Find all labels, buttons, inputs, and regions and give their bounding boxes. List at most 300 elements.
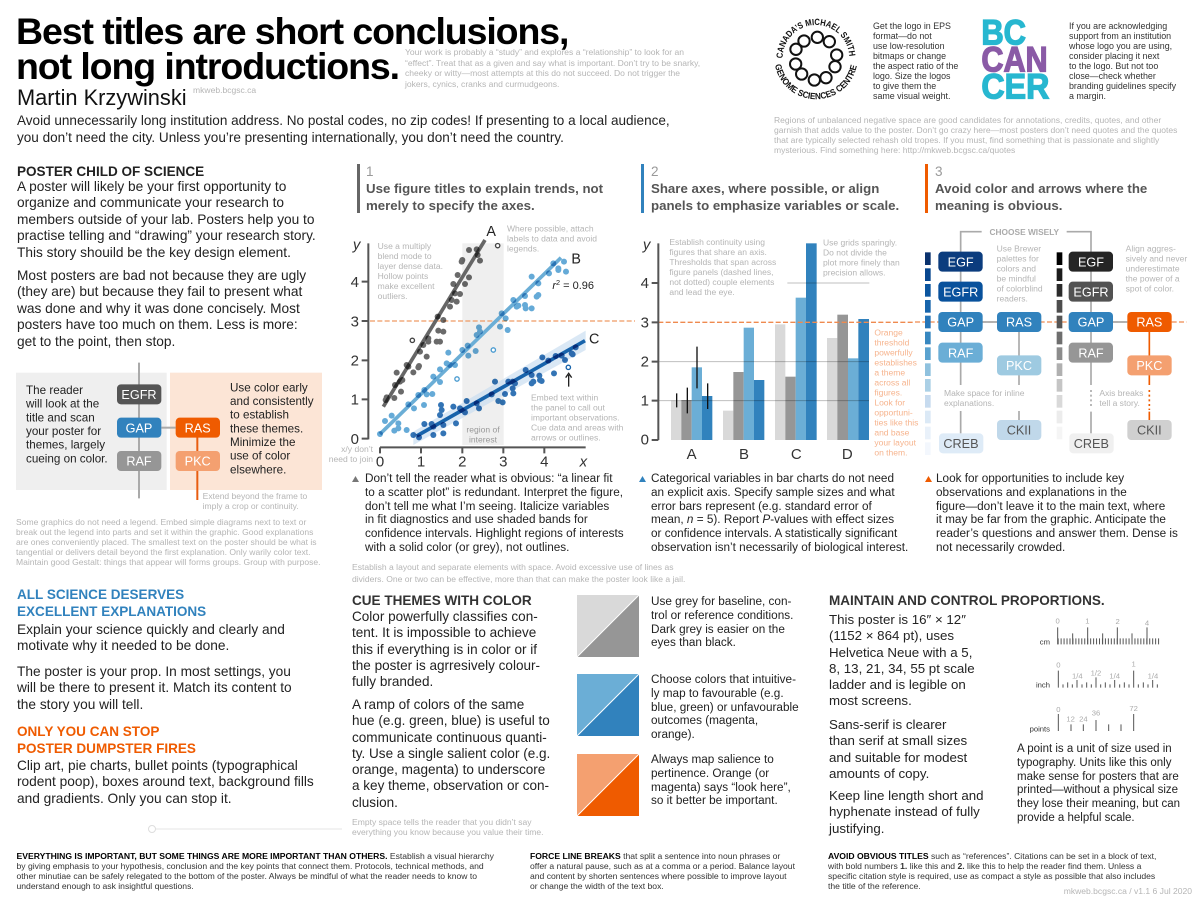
text: why posters are bad: get to the point, then stop. [17, 334, 175, 349]
tick labels: 0 [641, 432, 649, 449]
logo note 2: If you are acknowledging [1069, 21, 1167, 31]
series A [383, 240, 485, 407]
chart: pathway palettes [915, 227, 1188, 455]
title: not long introductions. [16, 44, 399, 86]
footnote: obvious titles: AVOID OBVIOUS TITLES such as “references”. Citations can be set in a block of text, [828, 851, 1156, 861]
logo note 2: support from an institution [1069, 31, 1171, 41]
note: orange threshold: a theme [874, 367, 905, 377]
node: PKC: PKC [185, 455, 211, 469]
text: poster size: ladder and is legible on [829, 677, 966, 692]
note: layout and dividers: Establish a layout and separate elements with space. Avoid excessive use of lines as [352, 562, 674, 572]
tick labels: 4 [351, 274, 359, 291]
caption 1 [352, 472, 624, 554]
note: orange threshold: establishes [874, 357, 917, 367]
grey and orange pathway nodes: CKII [1137, 424, 1162, 438]
text: why posters are bad: (they are) but because they fail to present what [17, 284, 302, 299]
note: grids: Do not divide the [823, 248, 887, 258]
note: empty space: Empty space tells the reader that you didn’t say [352, 817, 532, 827]
text: line length: hyphenate instead of fully [829, 804, 980, 819]
note: legends: are ones conveniently placed. The smallest text on the poster should be what is [16, 537, 317, 547]
note on negative space: mysterious. Find something here: http://mkweb.bcgsc.ca/quotes [774, 145, 1015, 155]
text: what a point is: make sense for posters that are [1017, 770, 1179, 782]
diagram: reader themes [16, 362, 322, 511]
node: RAS [176, 418, 220, 438]
node: GAP [117, 418, 161, 438]
text: salience: pertinence. Orange (or [651, 767, 769, 780]
note: orange threshold: Look for [874, 397, 905, 407]
affiliation text: Avoid unnecessarily long institution address. No postal codes, no zip codes! If presenting to a local audience, [17, 113, 670, 128]
tick labels: D [842, 446, 853, 463]
footnote: obvious titles: specific citation style is required, use as compact a style as possible that also includes [828, 871, 1155, 881]
grey and orange pathway nodes [1069, 252, 1172, 453]
blue pathway nodes: GAP [947, 316, 974, 330]
text: grey use: Dark grey is easier on the [651, 622, 785, 636]
caption 2: error bars represent (e.g. standard error of [651, 500, 872, 512]
rulers [1030, 616, 1160, 734]
heading: cue themes: CUE THEMES WITH COLOR [352, 593, 532, 608]
note: inline explanations: explanations. [944, 398, 994, 408]
caption 2: mean, n = 5). Report P-values with effect sizes [651, 513, 894, 526]
ruler: cm: 1 [1085, 616, 1089, 625]
text: choose colors: ly map to favourable (e.g. [651, 687, 784, 700]
note: empty space: everything you know because you value their time. [352, 827, 543, 837]
version credit: mkweb.bcgsc.ca / v1.1 6 Jul 2020 [1064, 886, 1192, 896]
label: choose wisely: CHOOSE WISELY [990, 227, 1060, 237]
chart: scatter plot [350, 223, 635, 470]
note: orange threshold: and base [874, 427, 910, 437]
tick labels: y [352, 236, 362, 253]
note: orange threshold: on them. [874, 447, 907, 457]
ruler: points: points [1030, 725, 1050, 734]
footnote: line breaks: offer a natural pause, such as at a comma or a period. Balance layout [530, 861, 795, 871]
footnote: obvious titles [828, 851, 1156, 891]
caption 3: reader’s questions and answer them. Dense is [936, 527, 1178, 540]
note: attach labels: labels to data and avoid [507, 233, 597, 243]
text: choose colors: orange). [651, 728, 695, 741]
text: the poster is your prop [17, 664, 292, 712]
blue pathway nodes: EGFR [943, 285, 978, 299]
note: region of interest: region of [466, 424, 500, 434]
note: brewer: be mindful [997, 274, 1036, 284]
note: embed text: the panel to call out [531, 403, 605, 413]
footnote: obvious titles: with bold numbers 1. like this and 2. like this to help the reader find them. Unless a [828, 861, 1141, 871]
note: orange threshold: across all [874, 377, 910, 387]
text: what a point is [1017, 743, 1180, 824]
note: multiply blend: Hollow points [378, 271, 428, 281]
series B [377, 258, 569, 437]
note: layout and dividers [352, 562, 685, 584]
caption 1: to a scatter plot” is redundant. Interpret the figure, [365, 486, 623, 499]
tick labels: 2 [458, 453, 467, 470]
note: orange threshold: Orange [874, 327, 903, 337]
node: GAP: GAP [126, 421, 152, 435]
footnote: hierarchy: by giving emphasis to your hypothesis, conclusion and the key points that connect them. Protocols, technical methods, and [16, 861, 484, 871]
text: what a point is: they lose their meaning, but can [1017, 798, 1180, 810]
series C [410, 341, 585, 440]
text: what a point is: printed—without a physical size [1017, 784, 1178, 796]
caption 3: Look for opportunities to include key [936, 472, 1124, 485]
ruler: cm: cm [1040, 637, 1050, 646]
note: align aggressively: spot of color. [1126, 284, 1174, 294]
text: poster intro [17, 179, 316, 260]
tick labels: 1 [641, 393, 649, 410]
tick labels: 0 [376, 453, 384, 470]
note: align aggressively: the power of a [1126, 274, 1180, 284]
heading: all science [17, 587, 206, 619]
ruler: cm: 0 [1056, 616, 1060, 625]
text: color classifies: the poster is agrresively colour- [352, 658, 540, 673]
text: salience [651, 753, 791, 807]
caption 2: observation isn’t necessarily of biological interest. [651, 541, 908, 554]
tick labels: 2 [351, 353, 359, 370]
caption 1: with a solid color (or grey), not outlines. [365, 541, 569, 554]
note: attach labels: Where possible, attach [507, 223, 594, 233]
text: clip art [17, 758, 314, 806]
blue pathway nodes: EGF [948, 255, 974, 269]
text: grey use [651, 595, 793, 649]
text: poster size: This poster is 16″ × 12″ [829, 612, 966, 627]
bars D [827, 315, 869, 440]
grey and orange pathway nodes: RAF [1078, 346, 1104, 360]
text: poster intro: practise telling and “drawing” your research story. [17, 228, 316, 243]
text: reader scans: will look at the [25, 398, 99, 411]
footnote: line breaks: and content by shorten sentences where possible to improve layout [530, 871, 787, 881]
tick labels: 0 [351, 431, 359, 448]
ruler: points: 0 [1056, 705, 1060, 714]
note on negative space: that are typically selected rehash old tropes. If you must, find something that is passionate and slightly [774, 135, 1159, 145]
note: embed text: arrows or outlines. [531, 433, 601, 443]
grey colour ramp [1057, 252, 1062, 439]
ruler: inch: 1 [1132, 660, 1136, 669]
series labels: 2 [556, 278, 560, 287]
caption 3: observations and explanations in the [936, 486, 1127, 499]
author url: mkweb.bcgsc.ca [193, 85, 256, 95]
ruler: inch: 1/2 [1091, 668, 1101, 677]
note: multiply blend: outliers. [378, 291, 407, 301]
logo note 2: to the logo. But not too [1069, 61, 1158, 71]
text: use color early: to establish [230, 409, 289, 422]
note: region of interest: interest [469, 434, 498, 444]
logo: genome sciences centre: GENOME SCIENCES CENTRE [775, 64, 857, 100]
text: color classifies: fully branded. [352, 674, 433, 689]
node: RAS: RAS [185, 421, 211, 435]
note: grids: Use grids sparingly. [823, 238, 897, 248]
text: explain your science: motivate why it needed to be done. [17, 638, 229, 653]
logo: bc cancer: CER [981, 67, 1049, 106]
x/y note: x/y don’t [341, 444, 373, 454]
heading: dumpster fires [17, 724, 196, 756]
note: multiply blend: Use a multiply [378, 241, 432, 251]
heading: dumpster fires: POSTER DUMPSTER FIRES [17, 741, 196, 756]
caption 3: not necessarily crowded. [936, 541, 1065, 554]
text: what a point is: A point is a unit of size used in [1017, 743, 1172, 755]
node: EGFR: EGFR [121, 388, 157, 402]
grey and orange pathway nodes: RAS [1136, 316, 1162, 330]
affiliation text: you don’t need the city. Unless you’re presenting internationally, you don’t need the country. [17, 130, 564, 145]
chart: bar chart [640, 236, 918, 463]
bars B [723, 328, 764, 440]
text: sans serif: Sans-serif is clearer [829, 717, 946, 732]
footnote: line breaks: FORCE LINE BREAKS that split a sentence into noun phrases or [530, 851, 780, 861]
grey and orange pathway nodes: PKC [1136, 359, 1162, 373]
footnote: obvious titles: the title of the reference. [828, 881, 921, 891]
node: PKC [176, 451, 220, 471]
note: embed text: important observations. [531, 413, 620, 423]
note: extend beyond frame: Extend beyond the frame to [203, 491, 308, 501]
note on negative space: Regions of unbalanced negative space are good candidates for annotations, credits, quotes, and other [774, 115, 1161, 125]
text: grey use: Use grey for baseline, con- [651, 595, 791, 608]
note: embed text: Cue data and areas with [531, 423, 624, 433]
note: multiply blend: layer dense data. [378, 261, 443, 271]
text: color classifies [352, 609, 540, 689]
text: reader scans: cueing on color. [26, 452, 108, 465]
caption 3: figure—don’t leave it to the main text, where [936, 500, 1165, 512]
text: sans serif: amounts of copy. [829, 766, 929, 781]
ruler: inch [1036, 660, 1159, 690]
logo note 1: same visual weight. [873, 91, 950, 101]
section 3 header [925, 164, 1147, 213]
note on title: “effect”. Treat that as a given and say what is important. Don’t try to be snarky, [405, 58, 700, 68]
note: continuity: not dotted) couple elements [669, 277, 774, 287]
text: explain your science: Explain your science quickly and clearly and [17, 622, 285, 637]
tick labels: C [791, 446, 802, 463]
text: why posters are bad: Most posters are bad not because they are ugly [17, 268, 306, 283]
note: legends: tangential or delivers detail beyond the first explanation. Only warily color text. [16, 547, 311, 557]
text: poster size: 8, 13, 21, 34, 55 pt scale [829, 661, 975, 676]
ruler: inch: 1/4 [1109, 672, 1121, 681]
note: embed text: Embed text within [531, 393, 598, 403]
text: use color early: Minimize the [230, 436, 295, 449]
caption 1: Don’t tell the reader what is obvious: “a linear fit [365, 472, 613, 485]
note: continuity: and lead the eye. [669, 287, 735, 297]
tick labels: 2 [641, 354, 649, 371]
note: orange threshold: powerfully [874, 347, 913, 357]
blue colour ramp [925, 252, 931, 455]
note: extend beyond frame: imply a crop or continuity. [203, 501, 299, 511]
author name: Martin Krzywinski [17, 85, 187, 110]
caption 3 [925, 472, 1178, 554]
text: the poster is your prop: the story you will tell. [17, 697, 143, 712]
grey and orange pathway nodes: EGF [1078, 255, 1104, 269]
text: why posters are bad: was done and why it was done concisely. Most [17, 301, 300, 316]
ruler: points [1030, 704, 1138, 734]
footnote: hierarchy: understand enough to ask insightful questions. [16, 881, 194, 891]
logo note 2: whose logo you are using, [1069, 41, 1172, 51]
arrow to outlier [566, 373, 572, 387]
logo: genome sciences centre [775, 18, 857, 100]
footnote: line breaks [530, 851, 795, 891]
note: inline explanations: Make space for inline [944, 388, 1025, 398]
ruler: cm [1040, 616, 1160, 646]
section 2 header [641, 164, 899, 213]
caption 2: Categorical variables in bar charts do not need [651, 472, 894, 485]
note: orange threshold: figures. [874, 387, 902, 397]
text: color classifies: tent. It is impossible to achieve [352, 625, 536, 640]
logo note 1: format—do not [873, 31, 932, 41]
section 3 header: 3 [935, 164, 943, 179]
tick labels [641, 236, 853, 463]
text: salience: magenta) says “look here”, [651, 780, 791, 794]
note: orange threshold: threshold [874, 337, 910, 347]
hollow outlier points [410, 244, 570, 381]
text: poster intro: A poster will likely be your first opportunity to [17, 179, 286, 194]
slider decoration [148, 825, 342, 833]
text: use color early: use of color [230, 450, 290, 463]
logo note 1 [873, 21, 958, 101]
caption 1: don’t tell me what I’m seeing. Italicize variables [365, 500, 609, 512]
text: reader scans: title and scan [26, 411, 95, 424]
swatch: blue [577, 674, 639, 736]
text: ramp of colors: communicate continuous quanti- [352, 730, 547, 745]
note: continuity: figure panels (dashed lines, [669, 267, 773, 277]
tick labels: y [642, 236, 652, 253]
blue pathway nodes: PKC [1006, 359, 1032, 373]
text: salience: Always map salience to [651, 753, 774, 766]
note: legends: Some graphics do not need a legend. Embed simple diagrams next to text or [16, 517, 306, 527]
note: layout and dividers: dividers. One or two can be effective, more than that can make the poster look like a jail. [352, 574, 685, 584]
note: multiply blend: make excellent [378, 281, 435, 291]
text: what a point is: typography. Units like this only [1017, 757, 1171, 769]
note: orange threshold: ties like this [874, 417, 918, 427]
text: choose colors [651, 673, 799, 741]
text: choose colors: outcomes (magenta, [651, 714, 758, 727]
text: use color early: Use color early [230, 381, 308, 394]
axes [362, 243, 586, 453]
ruler: points: 24 [1079, 715, 1088, 724]
text: poster intro: This story shouild be the key design element. [17, 245, 291, 260]
section 3 header: meaning is obvious. [935, 198, 1062, 213]
swatch: grey [577, 595, 639, 657]
note: continuity: Establish continuity using [669, 237, 765, 247]
text: why posters are bad: posters have too much on them. Less is more: [17, 317, 298, 332]
tick labels: 4 [540, 453, 549, 470]
section 1 header: Use figure titles to explain trends, not [366, 181, 603, 196]
blue pathway nodes [938, 252, 1041, 453]
ruler: points: 36 [1092, 708, 1100, 717]
text: clip art: and gradients. Only you can stop it. [17, 791, 232, 806]
text: grey use: eyes than black. [651, 636, 736, 649]
text: use color early: and consistently [230, 395, 314, 408]
ruler: points: 12 [1066, 715, 1075, 724]
text: poster intro: organize and communicate your research to [17, 195, 284, 210]
text: ramp of colors: hue (e.g. green, blue) is useful to [352, 713, 550, 728]
note: axis breaks: Axis breaks [1099, 388, 1143, 398]
note: brewer: of colorblind [997, 284, 1043, 294]
note: orange threshold: opportuni- [874, 407, 913, 417]
heading: all science: ALL SCIENCE DESERVES [17, 587, 184, 602]
text: sans serif: than serif at small sizes [829, 733, 967, 748]
text: the poster is your prop: will be there to present it. Match its content to [17, 680, 292, 695]
note on title: Your work is probably a “study” and explores a “relationship” to look for an [405, 47, 684, 57]
text: clip art: rodent poop), boxes around text, background fills [17, 774, 314, 789]
text: ramp of colors: orange, magenta) to underscore [352, 762, 545, 777]
logo note 2: branding guidelines specify [1069, 81, 1176, 91]
node: RAF [117, 451, 161, 471]
logo note 2: close—check whether [1069, 71, 1156, 81]
note: empty space [352, 817, 543, 837]
tick labels: A [687, 446, 697, 463]
heading: all science: EXCELLENT EXPLANATIONS [17, 604, 206, 619]
text: ramp of colors [352, 697, 550, 810]
series labels: r [552, 280, 557, 292]
caption 1: confidence intervals. Highlight regions of interests [365, 527, 624, 540]
ruler: inch: inch [1036, 681, 1050, 690]
logo note 1: to give them the [873, 81, 936, 91]
logo note 2: consider placing it next [1069, 51, 1159, 61]
section 2 header: Share axes, where possible, or align [651, 181, 879, 196]
text: poster size: (1152 × 864 pt), uses [829, 628, 954, 643]
note on title: cheeky or witty—most attempts at this do not succeed. Do not trigger the [405, 68, 680, 78]
text: reader scans: themes, largely [26, 439, 105, 452]
caption 2: an explicit axis. Specify sample sizes and what [651, 486, 895, 499]
note: brewer: Use Brewer [997, 244, 1041, 254]
ruler: cm: 4 [1145, 618, 1150, 627]
x/y note [329, 444, 373, 464]
text: choose colors: blue, green) or unfavourable [651, 700, 799, 714]
text: poster size: most screens. [829, 693, 912, 708]
section 1 header: 1 [366, 164, 374, 179]
text: grey use: trol or reference conditions. [651, 609, 793, 622]
tick labels: 3 [499, 453, 508, 470]
text: ramp of colors: a key theme, observation or con- [352, 778, 549, 793]
tick labels: 1 [417, 453, 425, 470]
footnote: line breaks: or change the width of the text box. [530, 881, 664, 891]
note on negative space: garnish that adds value to the poster. Don’t go crazy here—most posters don’t need quotes and the quotes [774, 125, 1177, 135]
ruler: inch: 0 [1056, 660, 1060, 669]
y axis [652, 243, 658, 440]
blue pathway nodes: CKII [1007, 424, 1031, 438]
footnote: hierarchy: other minutiae can be safely relegated to the bottom of the poster. Always be mindful of what the reader needs to know to [16, 871, 477, 881]
note: brewer: readers. [997, 294, 1028, 304]
footnote: hierarchy [16, 851, 494, 891]
note on negative space [774, 115, 1178, 155]
caption 3: it may be far from the graphic. Anticipate the [936, 513, 1166, 526]
series labels: C [589, 332, 599, 348]
text: color classifies: this if everything is in color or if [352, 642, 537, 657]
grey and orange pathway nodes: GAP [1078, 316, 1104, 330]
section 2 header: 2 [651, 164, 659, 179]
text: the poster is your prop: The poster is your prop. In most settings, you [17, 664, 291, 679]
caption 1: in fit diagnostics and use shaded bands for [365, 513, 588, 526]
logo note 1: logo. Size the logos [873, 71, 950, 81]
series labels: A [486, 224, 496, 240]
ruler: cm: 2 [1116, 617, 1120, 626]
text: clip art: Clip art, pie charts, bullet points (typographical [17, 758, 298, 773]
blue pathway nodes: RAS [1006, 316, 1032, 330]
text: line length [828, 788, 984, 836]
tick labels: 1 [351, 392, 359, 409]
title: Best titles are short conclusions, [16, 10, 568, 52]
note: brewer: palettes for [997, 254, 1039, 264]
text: use color early: elsewhere. [230, 463, 286, 476]
note on title: jokers, cynics, cranks and curmudgeons. [405, 79, 559, 89]
text: poster intro: members outside of your lab. Posters help you to [17, 212, 314, 227]
logo note 1: the aspect ratio of the [873, 61, 958, 71]
note: brewer: colors and [997, 264, 1036, 274]
text: color classifies: Color powerfully classifies con- [352, 609, 538, 624]
tick labels: 4 [641, 275, 649, 292]
logo note 2: a margin. [1069, 91, 1106, 101]
text: line length: justifying. [829, 821, 884, 836]
text: poster size [829, 612, 975, 708]
text: sans serif: and suitable for modest [829, 750, 967, 765]
section 1 header: merely to specify the axes. [366, 198, 535, 213]
blue pathway nodes: RAF [948, 346, 974, 360]
affiliation text [17, 113, 670, 145]
heading: proportions: MAINTAIN AND CONTROL PROPORTIONS. [829, 593, 1105, 608]
logo: bc cancer: BC [981, 14, 1026, 53]
note: continuity: figures that share an axis. [669, 247, 767, 257]
